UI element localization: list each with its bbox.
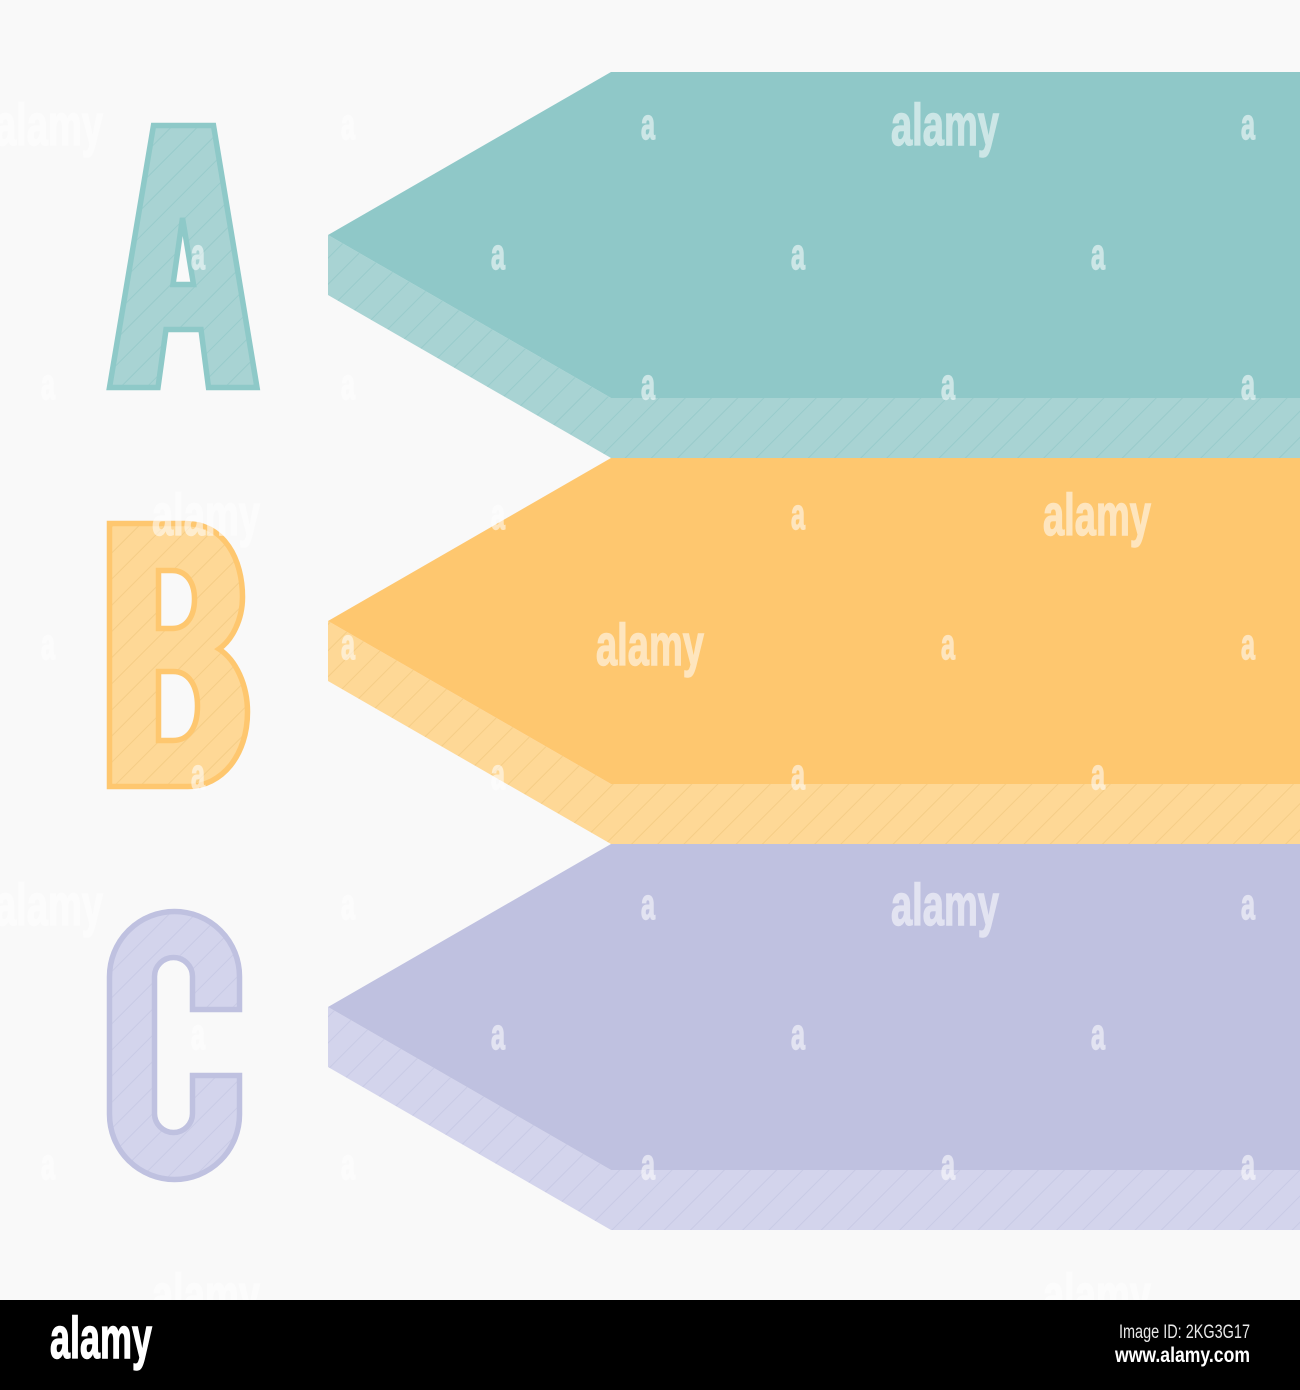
arrow B top face: [328, 458, 1300, 784]
letter B: [110, 524, 248, 786]
watermarks: a: [791, 1010, 805, 1059]
watermarks: a: [1091, 230, 1105, 279]
watermarks: alamy: [891, 93, 999, 158]
arrow C top face: [328, 844, 1300, 1170]
watermarks: alamy: [1043, 483, 1151, 548]
watermarks: a: [41, 360, 55, 409]
watermarks: a: [41, 1140, 55, 1189]
arrow B side face: [328, 621, 1300, 844]
watermarks: a: [1091, 1010, 1105, 1059]
watermarks: a: [41, 620, 55, 669]
watermarks: a: [341, 360, 355, 409]
arrow C side face: [328, 1007, 1300, 1230]
watermarks: a: [491, 1010, 505, 1059]
image id: Image ID: 2KG3G17: [1119, 1322, 1250, 1343]
letter C: [110, 912, 240, 1180]
watermarks: a: [941, 620, 955, 669]
watermarks: alamy: [1043, 1263, 1151, 1328]
watermarks: a: [341, 100, 355, 149]
watermarks: a: [491, 490, 505, 539]
watermarks: a: [341, 880, 355, 929]
watermarks: a: [491, 750, 505, 799]
arrow A: teal: [328, 72, 1300, 458]
watermarks: alamy: [596, 613, 704, 678]
watermarks: alamy: [152, 1263, 260, 1328]
website: www.alamy.com: [1114, 1344, 1250, 1367]
watermarks: a: [1091, 750, 1105, 799]
watermarks: a: [1241, 360, 1255, 409]
watermarks: a: [191, 1010, 205, 1059]
watermarks: a: [641, 880, 655, 929]
watermarks: a: [341, 620, 355, 669]
footer logo: alamy: [50, 1306, 152, 1371]
watermarks: a: [641, 360, 655, 409]
watermarks: a: [641, 1140, 655, 1189]
watermarks: a: [341, 1140, 355, 1189]
footer bar: [0, 1300, 1300, 1390]
watermarks: alamy: [891, 873, 999, 938]
watermarks: a: [791, 490, 805, 539]
arrow A top face: [328, 72, 1300, 398]
watermarks: a: [941, 360, 955, 409]
watermarks: a: [491, 230, 505, 279]
watermarks: a: [191, 750, 205, 799]
watermarks: a: [1241, 880, 1255, 929]
arrow A side face: [328, 235, 1300, 458]
watermarks: a: [1241, 1140, 1255, 1189]
watermarks: a: [641, 100, 655, 149]
watermarks: a: [791, 230, 805, 279]
watermarks: a: [791, 750, 805, 799]
watermarks: a: [941, 1140, 955, 1189]
letter A: [110, 126, 257, 388]
arrow C: lilac: [328, 844, 1300, 1230]
watermarks: alamy: [152, 483, 260, 548]
watermarks: a: [1241, 100, 1255, 149]
watermarks: a: [1241, 620, 1255, 669]
arrow B: orange: [328, 458, 1300, 844]
watermarks: a: [191, 230, 205, 279]
